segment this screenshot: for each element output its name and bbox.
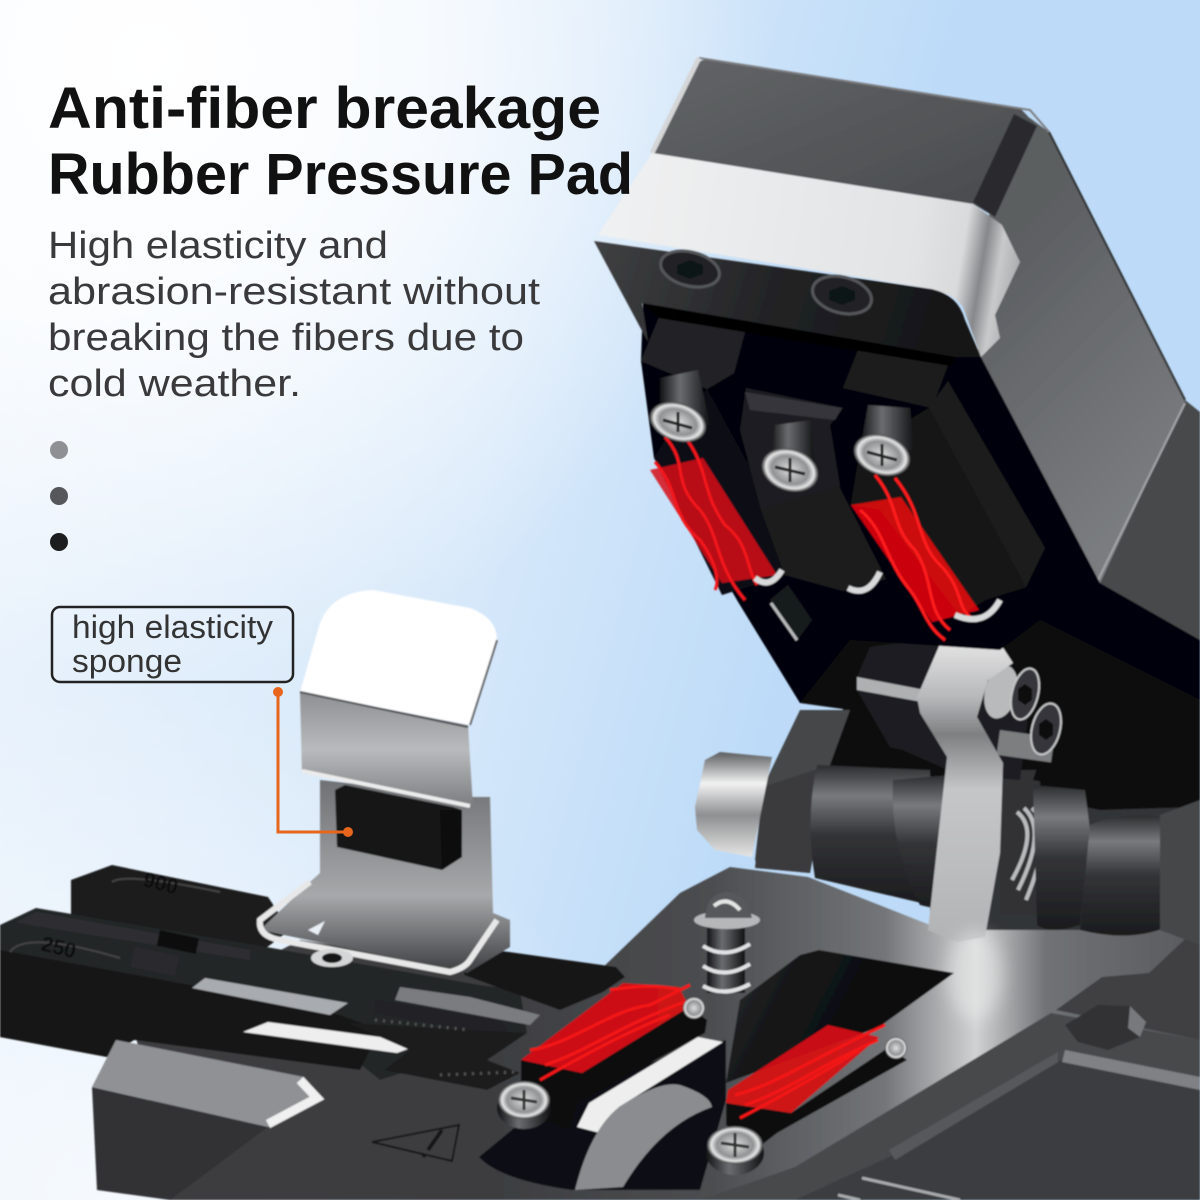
dark front face bbox=[594, 241, 981, 357]
spring bbox=[1012, 808, 1042, 900]
base light glow bbox=[947, 930, 1003, 1020]
title bbox=[48, 76, 633, 207]
sponge block bbox=[335, 785, 462, 870]
top textured face bbox=[652, 60, 1037, 217]
base plate bbox=[134, 867, 1200, 1200]
spring screw bbox=[694, 892, 760, 993]
description: cold weather. bbox=[48, 363, 301, 405]
upper blocks bbox=[641, 315, 746, 389]
right plate body bbox=[851, 408, 1026, 616]
silver pin bbox=[695, 752, 772, 857]
rail and 250 block bbox=[0, 908, 527, 1080]
fiber holder bbox=[0, 865, 625, 1090]
lid side bbox=[975, 118, 1200, 645]
warning triangle bbox=[372, 1125, 459, 1161]
hex bolt bbox=[1065, 1005, 1146, 1050]
labels 900 250: 900 bbox=[141, 869, 180, 899]
black bracket bbox=[1000, 617, 1113, 790]
description: breaking the fibers due to bbox=[48, 317, 524, 359]
small silver block bbox=[770, 585, 812, 642]
pagination dots bbox=[50, 441, 68, 551]
middle plate bbox=[740, 388, 843, 509]
title: Anti-fiber breakage bbox=[48, 76, 601, 141]
pressure flap with sponge bbox=[260, 590, 510, 973]
lid front and top bbox=[594, 58, 1049, 366]
callout: high elasticity sponge: sponge bbox=[72, 643, 182, 679]
lower notch and blade bbox=[479, 1037, 726, 1190]
textured hinge arm bbox=[755, 710, 850, 873]
lower red pads bbox=[497, 983, 907, 1175]
silver band bbox=[598, 153, 1020, 357]
left plate bbox=[654, 389, 796, 595]
lid screws bbox=[645, 370, 1000, 619]
hex head bolts bbox=[979, 662, 1066, 762]
fiber holder: 250 bbox=[39, 933, 78, 963]
description bbox=[48, 225, 540, 405]
silver block lower left bbox=[92, 1040, 321, 1200]
lid hex screws bbox=[657, 245, 875, 320]
black well bbox=[726, 950, 954, 1083]
lid inner cavity bbox=[641, 303, 1200, 703]
callout: high elasticity sponge: high elasticity bbox=[72, 609, 273, 645]
black lever bbox=[857, 637, 1030, 780]
red pads in lid bbox=[650, 437, 979, 640]
callout: high elasticity sponge bbox=[52, 607, 293, 682]
description: abrasion-resistant without bbox=[48, 271, 540, 313]
white blade bbox=[243, 1022, 424, 1053]
callout leader arrow bbox=[273, 687, 353, 837]
ruler bbox=[348, 1023, 527, 1090]
title: Rubber Pressure Pad bbox=[48, 142, 633, 207]
description: High elasticity and bbox=[48, 225, 388, 267]
hinge bbox=[695, 583, 1200, 945]
900 block bbox=[71, 865, 290, 960]
shaft bbox=[810, 765, 930, 905]
window bbox=[192, 978, 348, 1015]
silver center arm bbox=[917, 637, 1013, 942]
